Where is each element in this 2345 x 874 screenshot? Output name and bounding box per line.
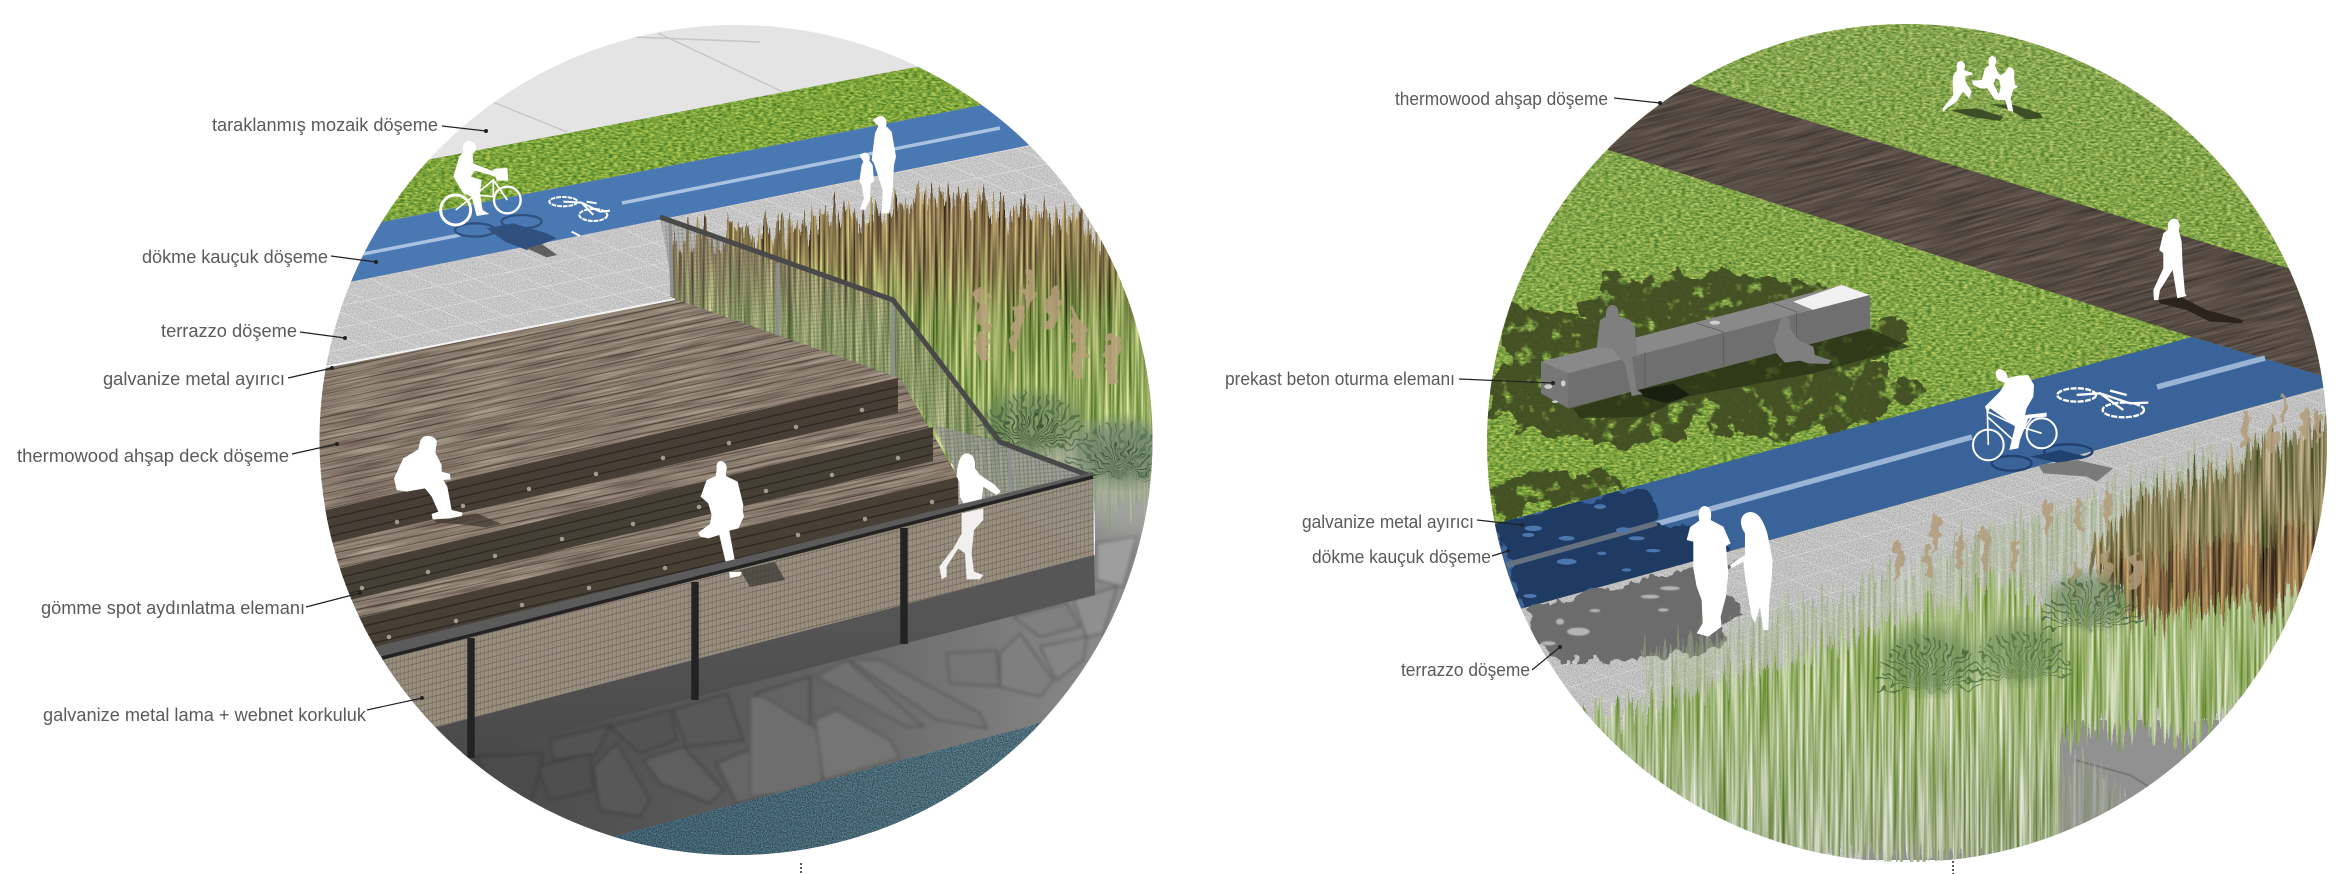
rubber cycle path [350,105,1030,282]
ornamental grass clumps, right [1884,574,2132,692]
cyclist silhouette, right [1973,369,2057,460]
water channel [613,721,1042,855]
dotted marker, right [1952,861,1954,874]
label: dökme kauçuk döşeme, right: dökme kauçuk döşeme [1312,546,1491,567]
label: terrazzo döşeme: terrazzo döşeme [161,320,297,341]
label: gömme spot aydınlatma elemanı: gömme spot aydınlatma elemanı [41,597,305,618]
label: terrazzo döşeme, right [1401,645,1562,680]
perched person silhouette [698,461,744,563]
label: galvanize metal lama + webnet korkuluk: galvanize metal lama + webnet korkuluk [43,704,367,725]
perched person foot [729,572,742,578]
tree shade on cycle path [1493,488,1740,608]
front handrail [370,472,1093,658]
walker silhouette [2153,218,2187,300]
ornamental grass clumps [980,392,1170,484]
rock revetment and pale ground [430,470,1180,860]
runners shadows [1950,104,2043,121]
icon: cycle lane symbol, right [2057,388,2148,417]
label: galvanize metal ayırıcı, right: galvanize metal ayırıcı [1302,511,1474,532]
runners silhouettes [1943,56,2018,112]
reed planting [672,195,1180,540]
cycle path, right [1480,337,2340,620]
panel: right circular detail, cycle path and reeds [1487,24,2327,862]
label: galvanize metal lama + webnet korkuluk [43,696,424,725]
dense reed planting [1500,585,2340,860]
couple silhouettes [1687,506,1773,637]
cyclist silhouette, left [441,141,521,225]
terrazzo paving, right [1480,383,2340,860]
walking person lower body [939,508,983,579]
label: galvanize metal ayırıcı: galvanize metal ayırıcı [103,368,285,389]
reed plumes [972,270,1119,383]
icon: cycle lane symbol [549,197,610,236]
tree shadow on lawn [1490,265,1920,523]
grass strip [382,66,982,222]
lower deck floor [376,508,1094,728]
reed veil over stone [1860,760,2130,860]
grey stone at the base [1860,720,2240,860]
deck fascia [436,555,1095,760]
adult and child silhouettes [859,116,896,213]
label: thermowood ahşap deck döşeme: thermowood ahşap deck döşeme [17,445,289,466]
thermowood path [1607,84,2322,376]
seated person silhouette [394,436,502,527]
walker shadow [2158,297,2243,323]
tree shade on terrazzo [1523,560,1743,660]
seated grey figures on bench [1597,305,1832,396]
label: dökme kauçuk döşeme: dökme kauçuk döşeme [142,246,328,267]
label: gömme spot aydınlatma elemanı [41,591,362,618]
reed plumes, right [1894,394,2321,600]
label: taraklanmış mozaik döşeme: taraklanmış mozaik döşeme [212,114,438,135]
walking person upper body [957,453,1001,503]
front railing mesh [370,478,1094,745]
timber deck top [320,299,960,655]
dotted marker, left [800,863,802,874]
label: terrazzo döşeme, right: terrazzo döşeme [1401,659,1530,680]
railing posts [471,528,904,758]
sparse reed tips [1640,420,2340,720]
cyclist shadow, right [1992,444,2113,482]
recessed spot lights [362,410,932,637]
mosaic paving [429,25,918,160]
cyclist shadow [455,215,557,257]
precast concrete bench [1541,285,1870,408]
label: thermowood ahşap döşeme: thermowood ahşap döşeme [1395,88,1608,109]
terrazzo paving [322,145,1150,398]
deck edge metal separator [320,299,675,368]
rear fence mesh [660,217,1093,555]
lawn [1480,20,2340,630]
panel: left circular detail, deck terraces [97,0,1205,860]
brown reed mass [2085,420,2340,625]
mesh shadow patch [740,562,785,587]
label: prekast beton oturma elemanı: prekast beton oturma elemanı [1225,368,1455,389]
step risers [300,378,958,668]
pale ground haze [1000,430,1180,540]
rear handrail [660,217,1093,477]
